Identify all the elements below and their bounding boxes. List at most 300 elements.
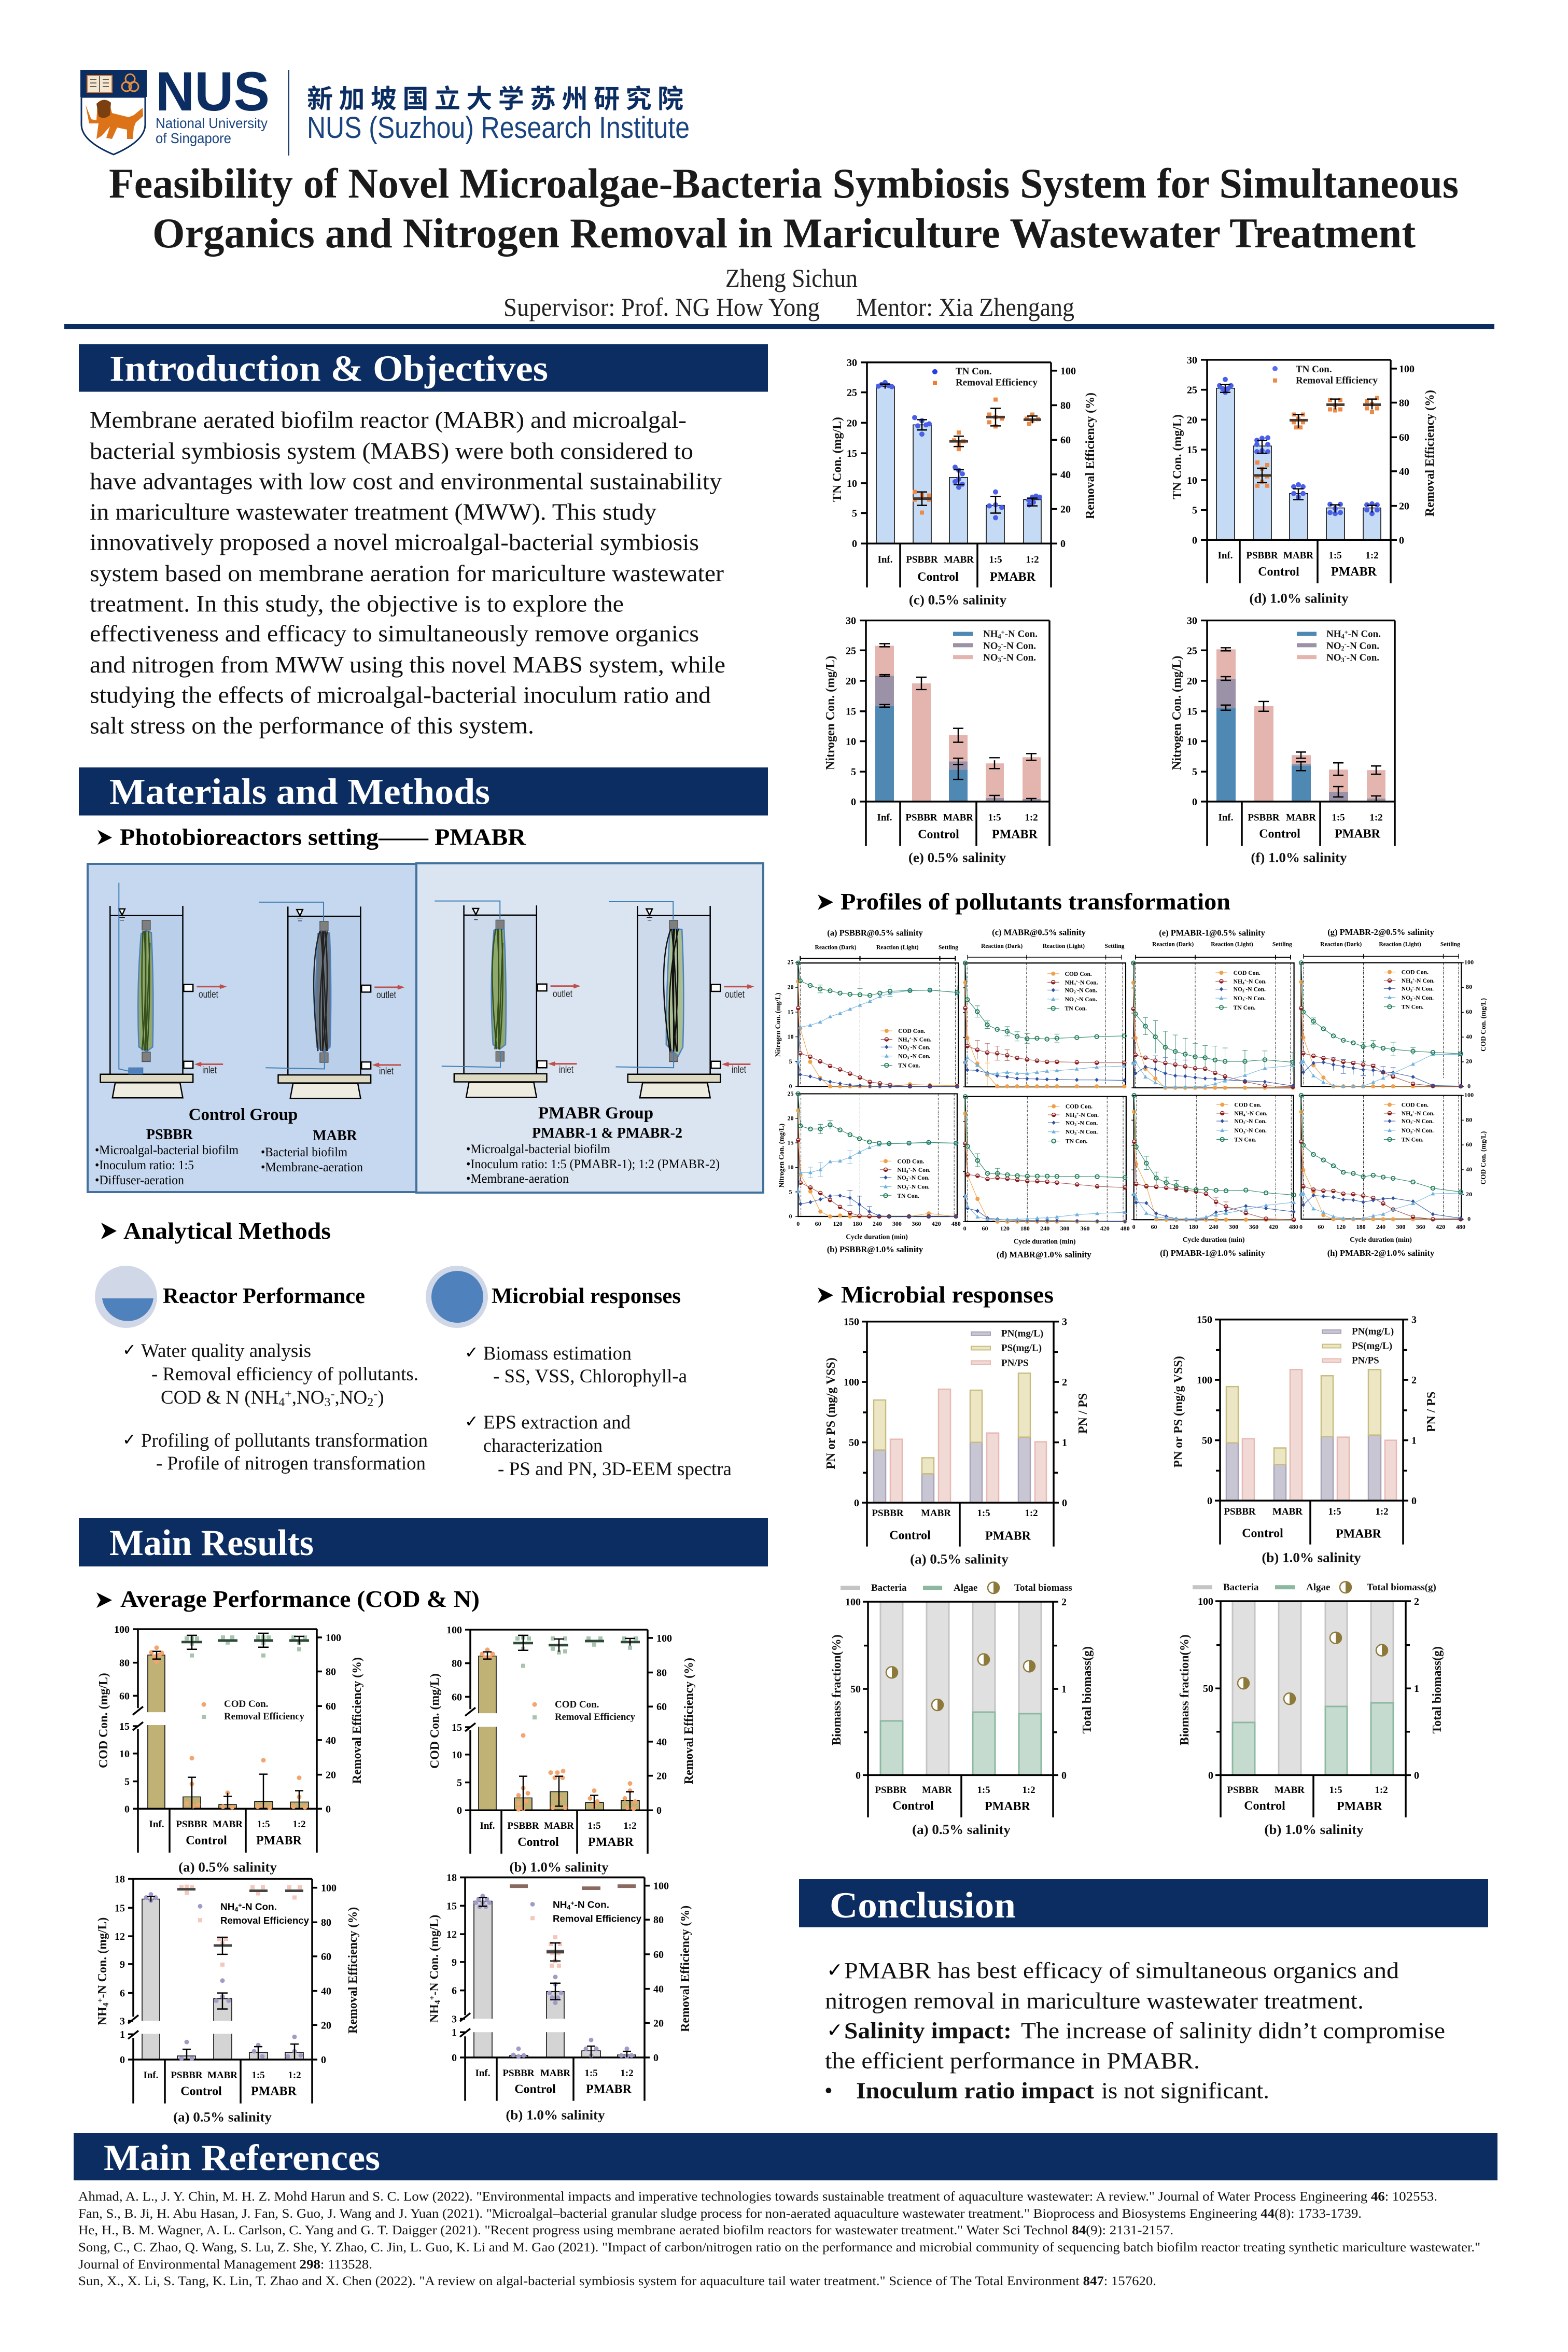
chart: PMABR-2 0.5% profile: 100 bbox=[1464, 958, 1474, 965]
chart: PSBBR 1.0% profile: 180 bbox=[853, 1220, 862, 1227]
chart: EPS 0.5% salinity: 0 bbox=[1062, 1497, 1067, 1509]
chart: biomass 0.5% salinity: 1:5 bbox=[977, 1785, 990, 1796]
chart: COD 0.5% salinity: Removal Efficiency (%) bbox=[351, 1657, 364, 1784]
chart: MABR 1.0% profile: 480 bbox=[1121, 1225, 1130, 1232]
text block: introduction: have advantages with low cost and environmental sustainability bbox=[90, 468, 722, 495]
chart: biomass 1.0% salinity: Biomass fraction(%) bbox=[1178, 1634, 1192, 1745]
list: reactor performance methods: COD & N (NH4+,NO3-,NO2-) bbox=[161, 1387, 384, 1409]
list: microbial response methods: - PS and PN, 3D-EEM spectra bbox=[498, 1459, 732, 1480]
chart: PMABR-1 1.0% profile: 60 bbox=[1151, 1223, 1157, 1230]
chart: nitrogen species 0.5% salinity: 15 bbox=[846, 706, 856, 718]
chart: PMABR-1 1.0% profile: NO2--N Con. bbox=[1234, 1118, 1267, 1125]
diagram: PMABR-1 reactor bbox=[435, 901, 578, 1097]
wordmark: National University of Singapore: of Singapore bbox=[156, 130, 231, 146]
chart: MABR 1.0% profile: 420 bbox=[1100, 1225, 1110, 1232]
chart: TN 1.0% salinity: Inf. bbox=[1217, 550, 1233, 561]
chart: biomass 0.5% salinity: Biomass fraction(%) bbox=[830, 1634, 844, 1745]
chart: TN 0.5% salinity: Removal Efficiency bbox=[956, 377, 1038, 388]
chart: MABR 0.5% profile: NO3--N Con. bbox=[1065, 996, 1097, 1003]
chart: PMABR-2 0.5% profile: NO3--N Con. bbox=[1402, 994, 1434, 1002]
text block: references: He, H., B. M. Wagner, A. L. Carlson, C. Yang and G. T. Daigger (2021). "Recent progress using membrane aerated biofilm reactors for wastewater treatment." Water Sci Technol 84(9): 2131-2157. bbox=[78, 2223, 1173, 2237]
wordmark: National University of Singapore bbox=[156, 115, 268, 146]
chart: biomass 1.0% salinity: 1 bbox=[1414, 1683, 1419, 1695]
chart: TN 1.0% salinity: 60 bbox=[1399, 432, 1409, 443]
chart: TN 1.0% salinity: 40 bbox=[1399, 466, 1409, 478]
chart: COD 0.5% salinity: 60 bbox=[119, 1690, 130, 1702]
chart: PSBBR 1.0% profile: 60 bbox=[815, 1220, 821, 1227]
chart: biomass 1.0% salinity: PSBBR bbox=[1227, 1785, 1259, 1796]
chart: nitrogen species 0.5% salinity bbox=[824, 615, 1049, 865]
chart: PMABR-2 0.5% profile: Reaction (Light) bbox=[1379, 941, 1421, 948]
chart: biomass 0.5% salinity: Bacteria bbox=[871, 1583, 907, 1593]
chart: PSBBR 0.5% profile: 5 bbox=[789, 1058, 792, 1065]
text block: conclusion: PMABR has best efficacy of simultaneous organics and bbox=[844, 1957, 1399, 1983]
chart: PSBBR 1.0% profile: TN Con. bbox=[897, 1193, 919, 1199]
chart: PMABR-2 0.5% profile: TN Con. bbox=[1402, 1004, 1423, 1011]
label: PSBBR: •Microalgal-bacterial biofilm bbox=[95, 1143, 239, 1157]
chart: TN 1.0% salinity: 0 bbox=[1192, 535, 1197, 546]
section header: Conclusion: Conclusion bbox=[830, 1885, 1016, 1926]
chart: COD 0.5% salinity: 10 bbox=[119, 1748, 130, 1760]
chart: PMABR-2 1.0% profile bbox=[1299, 1091, 1487, 1258]
chart: PMABR-2 0.5% profile bbox=[1301, 927, 1487, 1089]
chart: PMABR-1 1.0% profile: TN Con. bbox=[1234, 1136, 1256, 1143]
chart: TN 0.5% salinity: Control bbox=[917, 570, 959, 584]
text block: introduction: Membrane aerated biofilm reactor (MABR) and microalgal- bbox=[90, 407, 687, 433]
subheading: Microbial responses: Microbial responses bbox=[841, 1281, 1054, 1308]
chart: PMABR-1 1.0% profile: 240 bbox=[1209, 1223, 1219, 1230]
chart: PSBBR 1.0% profile: Nitrogen Con. (mg/L) bbox=[778, 1124, 786, 1187]
chart: TN 1.0% salinity: 15 bbox=[1187, 444, 1197, 456]
chart: TN 1.0% salinity: 1:2 bbox=[1365, 550, 1379, 561]
chart: TN 1.0% salinity: 1:5 bbox=[1328, 550, 1342, 561]
text block: references bbox=[78, 2190, 1480, 2288]
chart: biomass 0.5% salinity: (a) 0.5% salinity bbox=[912, 1822, 1011, 1837]
panel: control group reactors bbox=[88, 864, 416, 1192]
chart: PSBBR 0.5% profile: NO3--N Con. bbox=[898, 1053, 931, 1060]
chart: TN 0.5% salinity: TN Con. (mg/L) bbox=[831, 417, 844, 502]
chart: PMABR-2 0.5% profile: 0 bbox=[1467, 1082, 1471, 1089]
chart: ammonium 1.0% salinity: Control bbox=[514, 2083, 556, 2096]
text block: conclusion: ✓ bbox=[827, 2019, 843, 2041]
chart: COD 1.0% salinity: 15 bbox=[452, 1722, 462, 1733]
chart: MABR 0.5% profile: NH4+-N Con. bbox=[1065, 979, 1098, 986]
chart: ammonium 1.0% salinity: NH4+-N Con. bbox=[553, 1899, 609, 1911]
chart: PMABR-2 0.5% profile: Reaction (Dark) bbox=[1320, 941, 1362, 948]
chart: PMABR-2 1.0% profile: 300 bbox=[1396, 1223, 1405, 1230]
text block: introduction bbox=[90, 407, 725, 738]
chart: TN 1.0% salinity: 5 bbox=[1192, 505, 1197, 516]
chart: EPS 0.5% salinity: MABR bbox=[921, 1508, 951, 1519]
chart: PMABR-2 0.5% profile: 20 bbox=[1466, 1058, 1472, 1065]
chart: nitrogen species 1.0% salinity: 0 bbox=[1192, 796, 1197, 808]
chart: ammonium 0.5% salinity: NH4+-N Con. bbox=[220, 1901, 277, 1913]
chart: EPS 1.0% salinity: 1:5 bbox=[1328, 1506, 1341, 1517]
section header: Main References: Main References bbox=[104, 2138, 380, 2178]
heading: Microbial responses: Microbial responses bbox=[492, 1284, 681, 1308]
institute name Chinese: 新加坡国立大学苏州研究院 bbox=[307, 85, 683, 114]
chart: TN 1.0% salinity: PSBBR bbox=[1246, 550, 1278, 561]
chart: EPS 0.5% salinity: 1:5 bbox=[977, 1508, 990, 1519]
text block: conclusion: The increase of salinity didn’t compromise bbox=[1021, 2018, 1445, 2043]
chart: ammonium 0.5% salinity: 100 bbox=[321, 1883, 337, 1894]
chart: MABR 1.0% profile: TN Con. bbox=[1066, 1138, 1087, 1145]
chart: COD 1.0% salinity: 10 bbox=[452, 1749, 462, 1761]
chart: biomass 0.5% salinity: PSBBR bbox=[875, 1785, 907, 1796]
chart: PMABR-2 1.0% profile: COD Con. (mg/L) bbox=[1479, 1131, 1487, 1185]
chart: PMABR-1 0.5% profile: Reaction (Light) bbox=[1211, 941, 1253, 948]
chart: PMABR-2 1.0% profile: 80 bbox=[1466, 1116, 1472, 1123]
chart: PMABR-2 1.0% profile: 240 bbox=[1376, 1223, 1385, 1230]
chart: PSBBR 1.0% profile: 420 bbox=[932, 1220, 941, 1227]
label: PMABR Group: PMABR Group bbox=[538, 1104, 653, 1123]
chart: ammonium 1.0% salinity: 40 bbox=[653, 1984, 664, 1995]
text block: conclusion: is not significant. bbox=[1101, 2078, 1269, 2103]
chart: ammonium 1.0% salinity: Removal Efficiency (%) bbox=[679, 1906, 692, 2032]
chart: biomass 1.0% salinity: 1:2 bbox=[1375, 1785, 1388, 1796]
label: PSBBR bbox=[95, 1127, 239, 1187]
title: Feasibility of Novel Microalgae-Bacteria Symbiosis System for Simultaneous bbox=[109, 160, 1459, 207]
chart: PSBBR 1.0% profile: 25 bbox=[788, 1090, 794, 1097]
chart: ammonium 1.0% salinity: 100 bbox=[653, 1881, 669, 1892]
chart: EPS 0.5% salinity: 50 bbox=[849, 1437, 859, 1449]
chart: PMABR-1 0.5% profile: COD Con. bbox=[1234, 970, 1261, 976]
chart: biomass 0.5% salinity bbox=[830, 1582, 1094, 1837]
chart: PMABR-2 0.5% profile: 60 bbox=[1466, 1008, 1472, 1015]
chart: COD 0.5% salinity: COD Con. (mg/L) bbox=[97, 1673, 110, 1768]
chart: PMABR-1 1.0% profile: 120 bbox=[1169, 1223, 1179, 1230]
chart: ammonium 1.0% salinity: 1:2 bbox=[620, 2068, 634, 2079]
list: reactor performance methods: Water quality analysis bbox=[141, 1340, 311, 1362]
chart: PMABR-2 0.5% profile: NH4+-N Con. bbox=[1402, 977, 1435, 985]
chart: COD 1.0% salinity: 5 bbox=[457, 1777, 462, 1788]
chart: PMABR-2 1.0% profile: 120 bbox=[1336, 1223, 1346, 1230]
chart: COD 0.5% salinity: 100 bbox=[114, 1624, 130, 1635]
section header: Main References bbox=[74, 2133, 1497, 2180]
chart: ammonium 1.0% salinity: PMABR bbox=[586, 2083, 632, 2096]
chart: PMABR-2 0.5% profile: COD Con. bbox=[1402, 969, 1429, 976]
chart: PMABR-2 0.5% profile: COD Con. (mg/L) bbox=[1479, 998, 1487, 1052]
chart: biomass 0.5% salinity: 0 bbox=[856, 1770, 861, 1781]
chart: MABR 1.0% profile: 180 bbox=[1020, 1225, 1030, 1232]
chart: ammonium 0.5% salinity: 6 bbox=[120, 1988, 125, 1999]
panel: control group reactors: inlet bbox=[379, 1066, 394, 1077]
chart: nitrogen species 0.5% salinity: 1:2 bbox=[1025, 813, 1038, 823]
chart: biomass 0.5% salinity: Algae bbox=[954, 1583, 977, 1593]
chart: ammonium 1.0% salinity: 6 bbox=[452, 1985, 457, 1997]
chart: PMABR-2 1.0% profile: 40 bbox=[1466, 1166, 1472, 1173]
chart: ammonium 0.5% salinity: 80 bbox=[321, 1917, 331, 1928]
chart: COD 1.0% salinity bbox=[428, 1625, 696, 1875]
chart: biomass 0.5% salinity: Total biomass(g) bbox=[1081, 1646, 1094, 1733]
chart: PMABR-2 1.0% profile: 20 bbox=[1466, 1191, 1472, 1198]
label: PMABR-1 and PMABR-2 details: PMABR-1 & PMABR-2 bbox=[532, 1125, 682, 1141]
chart: PSBBR 1.0% profile: 15 bbox=[788, 1139, 794, 1146]
chart: MABR 0.5% profile: Reaction (Light) bbox=[1043, 943, 1085, 949]
chart: TN 0.5% salinity: PMABR bbox=[990, 570, 1036, 584]
chart: COD 0.5% salinity: PSBBR bbox=[176, 1819, 208, 1830]
chart: TN 1.0% salinity: 100 bbox=[1399, 363, 1415, 375]
chart: COD 1.0% salinity: 1:5 bbox=[587, 1821, 601, 1831]
chart: ammonium 0.5% salinity: NH4+-N Con. (mg/L) bbox=[96, 1917, 110, 2025]
chart: ammonium 0.5% salinity: Removal Efficiency bbox=[220, 1915, 309, 1926]
chart: nitrogen species 1.0% salinity: NH4+-N Con. bbox=[1326, 628, 1381, 640]
chart: biomass 1.0% salinity: Total biomass(g) bbox=[1367, 1582, 1436, 1593]
subheading: Photobioreactors setting: Photobioreactors setting—— PMABR bbox=[120, 823, 526, 850]
chart: COD 1.0% salinity: 20 bbox=[656, 1771, 667, 1782]
chart: PSBBR 0.5% profile: 20 bbox=[788, 984, 794, 991]
chart: PSBBR 1.0% profile: 10 bbox=[788, 1164, 794, 1171]
chart: COD 1.0% salinity: 60 bbox=[656, 1701, 667, 1713]
chart: MABR 1.0% profile bbox=[963, 1097, 1130, 1259]
panel: PMABR group reactors: outlet bbox=[553, 989, 573, 1000]
chart: PMABR-2 1.0% profile: 100 bbox=[1464, 1091, 1474, 1099]
section header: Main Results bbox=[79, 1518, 768, 1566]
chart: biomass 1.0% salinity: 0 bbox=[1414, 1770, 1419, 1781]
chart: ammonium 1.0% salinity: (b) 1.0% salinity bbox=[506, 2107, 605, 2122]
chart: COD 0.5% salinity: 0 bbox=[326, 1803, 331, 1815]
chart: EPS 1.0% salinity: 0 bbox=[1207, 1495, 1212, 1507]
chart: PMABR-2 0.5% profile: NO2--N Con. bbox=[1402, 985, 1434, 992]
chart: ammonium 0.5% salinity: PSBBR bbox=[171, 2070, 203, 2081]
chart: MABR 1.0% profile: 60 bbox=[982, 1225, 988, 1232]
chart: PMABR-2 1.0% profile: TN Con. bbox=[1402, 1136, 1423, 1143]
chart: ammonium 1.0% salinity: Removal Efficiency bbox=[553, 1913, 641, 1924]
chart: PMABR-2 1.0% profile: NH4+-N Con. bbox=[1402, 1110, 1435, 1117]
chart: nitrogen species 1.0% salinity: Inf. bbox=[1218, 813, 1234, 823]
chart: nitrogen species 1.0% salinity: (f) 1.0% salinity bbox=[1251, 849, 1347, 865]
chart: ammonium 0.5% salinity: 0 bbox=[120, 2054, 125, 2066]
chart: biomass 0.5% salinity: Control bbox=[892, 1799, 934, 1813]
chart: nitrogen species 0.5% salinity: NH4+-N Con. bbox=[983, 628, 1038, 640]
chart: PMABR-1 0.5% profile: (e) PMABR-1@0.5% salinity bbox=[1159, 928, 1266, 938]
list: microbial response methods: EPS extraction and bbox=[483, 1412, 631, 1433]
chart: ammonium 0.5% salinity: 60 bbox=[321, 1951, 331, 1963]
chart: nitrogen species 1.0% salinity: MABR bbox=[1286, 813, 1316, 823]
chart: ammonium 1.0% salinity: 1 bbox=[452, 2027, 457, 2038]
chart: ammonium 1.0% salinity: 80 bbox=[653, 1914, 664, 1926]
chart: EPS 1.0% salinity: (b) 1.0% salinity bbox=[1262, 1549, 1361, 1565]
chart: nitrogen species 0.5% salinity: 25 bbox=[846, 645, 856, 656]
text block: references: Journal of Environmental Management 298: 113528. bbox=[78, 2258, 372, 2272]
chart: EPS 0.5% salinity bbox=[824, 1317, 1090, 1566]
chart: COD 1.0% salinity: 60 bbox=[452, 1691, 462, 1703]
chart: biomass 1.0% salinity: (b) 1.0% salinity bbox=[1264, 1822, 1364, 1837]
chart: PMABR-2 1.0% profile: 480 bbox=[1456, 1223, 1465, 1230]
chart: TN 1.0% salinity: Removal Efficiency (%) bbox=[1423, 390, 1437, 516]
wordmark: National University of Singapore: National University bbox=[156, 115, 268, 131]
chart: ammonium 1.0% salinity: 3 bbox=[452, 2013, 457, 2025]
chart: nitrogen species 0.5% salinity: 1:5 bbox=[988, 813, 1001, 823]
chart: nitrogen species 0.5% salinity: Inf. bbox=[877, 813, 892, 823]
chart: PMABR-1 1.0% profile: COD Con. bbox=[1234, 1101, 1262, 1108]
chart: PSBBR 1.0% profile: 480 bbox=[951, 1220, 961, 1227]
chart: ammonium 0.5% salinity: 40 bbox=[321, 1986, 331, 1997]
list: reactor performance methods: - Removal efficiency of pollutants. bbox=[151, 1364, 418, 1385]
chart: PSBBR 0.5% profile: COD Con. bbox=[898, 1028, 925, 1034]
chart: COD 0.5% salinity: 0 bbox=[124, 1803, 130, 1815]
chart: COD 1.0% salinity: COD Con. bbox=[555, 1699, 599, 1710]
chart: PSBBR 1.0% profile: 0 bbox=[789, 1213, 792, 1220]
chart: EPS 0.5% salinity: 150 bbox=[844, 1317, 859, 1328]
chart: ammonium 0.5% salinity: (a) 0.5% salinity bbox=[173, 2109, 272, 2124]
text block: references: Fan, S., B. Ji, H. Abu Hasan, J. Fan, S. Guo, J. Wang and J. Yuan (2021). "Microalgal–bacterial granular sludge process for non-aerated aquaculture wastewater treatment." Bioprocess and Biosystems Engineering 44(8): 1733-1739. bbox=[78, 2207, 1362, 2221]
chart: TN 1.0% salinity: 25 bbox=[1187, 385, 1197, 396]
chart: TN 1.0% salinity: PMABR bbox=[1331, 565, 1377, 579]
section header: Materials and Methods: Materials and Methods bbox=[109, 772, 490, 813]
chart: PSBBR 1.0% profile: 120 bbox=[833, 1220, 843, 1227]
chart: TN 1.0% salinity: 20 bbox=[1187, 414, 1197, 426]
chart: COD 0.5% salinity: (a) 0.5% salinity bbox=[178, 1859, 277, 1875]
chart: TN 0.5% salinity bbox=[831, 357, 1097, 608]
chart: EPS 1.0% salinity: PN or PS (mg/g VSS) bbox=[1172, 1356, 1185, 1468]
chart: COD 1.0% salinity: 0 bbox=[656, 1805, 662, 1816]
chart: COD 1.0% salinity: PMABR bbox=[588, 1836, 634, 1849]
list: microbial response methods: - SS, VSS, Chlorophyll-a bbox=[493, 1366, 687, 1387]
panel: control group reactors: inlet bbox=[202, 1065, 217, 1076]
label: PMABR-1 and PMABR-2 details: •Inoculum ratio: 1:5 (PMABR-1); 1:2 (PMABR-2) bbox=[466, 1157, 720, 1171]
chart: MABR 1.0% profile: 360 bbox=[1080, 1225, 1089, 1232]
chart: PMABR-1 1.0% profile: 420 bbox=[1269, 1223, 1278, 1230]
chart: EPS 0.5% salinity: PMABR bbox=[985, 1530, 1031, 1543]
text block: references: Sun, X., X. Li, S. Tang, K. Lin, T. Zhao and X. Chen (2022). "A review on algal-bacterial symbiosis system for aquaculture tail water treatment." Science of The Total Environment 847: 157620. bbox=[78, 2274, 1156, 2288]
chart: EPS 0.5% salinity: (a) 0.5% salinity bbox=[910, 1551, 1009, 1566]
chart: nitrogen species 0.5% salinity: (e) 0.5% salinity bbox=[908, 849, 1006, 865]
chart: MABR 1.0% profile: COD Con. bbox=[1066, 1103, 1093, 1110]
chart: ammonium 1.0% salinity bbox=[428, 1872, 692, 2122]
chart: EPS 1.0% salinity: 2 bbox=[1411, 1375, 1417, 1386]
chart: PSBBR 0.5% profile: Reaction (Dark) bbox=[815, 944, 857, 950]
chart: TN 1.0% salinity: MABR bbox=[1283, 550, 1313, 561]
chart: TN 1.0% salinity: Control bbox=[1258, 565, 1299, 579]
diagram: PMABR-2 reactor bbox=[609, 902, 752, 1098]
chart: COD 0.5% salinity: MABR bbox=[213, 1819, 243, 1830]
chart: PSBBR 1.0% profile: NO2--N Con. bbox=[897, 1174, 930, 1182]
chart: nitrogen species 0.5% salinity: PMABR bbox=[992, 828, 1038, 842]
chart: TN 0.5% salinity: PSBBR bbox=[906, 554, 938, 565]
chart: PSBBR 0.5% profile bbox=[774, 928, 958, 1090]
chart: PMABR-1 1.0% profile: 0 bbox=[1132, 1223, 1136, 1230]
label: PMABR-1 and PMABR-2 details: •Microalgal-bacterial biofilm bbox=[466, 1142, 611, 1156]
chart: biomass 1.0% salinity: 50 bbox=[1203, 1683, 1213, 1695]
chart: TN 1.0% salinity: 80 bbox=[1399, 398, 1409, 409]
chart: ammonium 1.0% salinity: NH4+-N Con. (mg/L) bbox=[428, 1915, 442, 2023]
chart: PMABR-2 0.5% profile: Settling bbox=[1440, 941, 1460, 948]
subheading: Analytical Methods: Analytical Methods bbox=[123, 1217, 331, 1244]
chart: TN 1.0% salinity: 20 bbox=[1399, 501, 1409, 512]
chart: nitrogen species 1.0% salinity: Control bbox=[1259, 828, 1300, 841]
list: microbial response methods: characterization bbox=[483, 1435, 603, 1457]
chart: EPS 1.0% salinity: 3 bbox=[1411, 1314, 1417, 1326]
chart: TN 0.5% salinity: 10 bbox=[847, 478, 857, 489]
chart: PSBBR 1.0% profile: Cycle duration (min) bbox=[846, 1233, 908, 1240]
text block: references: Song, C., C. Zhao, Q. Wang, S. Lu, Z. She, Y. Zhao, C. Jin, L. Guo, K. Li and M. Gao (2021). "Impact of carbon/nitrogen ratio on the performance and microbial community of sequencing batch biofilm reactor treating synthetic mariculture wastewater." bbox=[78, 2241, 1480, 2255]
authors bbox=[503, 263, 1074, 321]
chart: TN 0.5% salinity: 0 bbox=[1060, 538, 1066, 550]
chart: biomass 0.5% salinity: 1 bbox=[1061, 1684, 1067, 1695]
chart: TN 1.0% salinity: 30 bbox=[1187, 355, 1197, 366]
chart: COD 0.5% salinity: PMABR bbox=[256, 1834, 302, 1847]
chart: COD 1.0% salinity: 80 bbox=[452, 1658, 462, 1670]
chart: nitrogen species 1.0% salinity: 1:5 bbox=[1332, 813, 1345, 823]
chart: biomass 1.0% salinity: 100 bbox=[1198, 1596, 1213, 1607]
chart: MABR 0.5% profile: (c) MABR@0.5% salinity bbox=[992, 928, 1086, 937]
text block: introduction: salt stress on the performance of this system. bbox=[90, 712, 534, 738]
chart: nitrogen species 0.5% salinity: NO2--N Con. bbox=[983, 640, 1036, 652]
chart: biomass 1.0% salinity: 2 bbox=[1414, 1596, 1419, 1607]
chart: PMABR-1 0.5% profile: TN Con. bbox=[1234, 1004, 1255, 1011]
chart: PSBBR 0.5% profile: Reaction (Light) bbox=[876, 944, 919, 950]
chart: MABR 1.0% profile: Cycle duration (min) bbox=[1014, 1237, 1076, 1245]
chart: PMABR-2 1.0% profile: COD Con. bbox=[1402, 1101, 1429, 1108]
text block: conclusion bbox=[824, 1957, 1445, 2103]
text block: conclusion: the efficient performance in PMABR. bbox=[825, 2048, 1200, 2074]
chart: nitrogen species 1.0% salinity: PSBBR bbox=[1248, 813, 1280, 823]
panel: PMABR group reactors: inlet bbox=[559, 1065, 574, 1075]
chart: nitrogen species 1.0% salinity: 1:2 bbox=[1369, 813, 1383, 823]
chart: biomass 0.5% salinity: PMABR bbox=[985, 1800, 1031, 1813]
chart: MABR 1.0% profile: 300 bbox=[1060, 1225, 1070, 1232]
chart: ammonium 1.0% salinity: 15 bbox=[446, 1900, 457, 1912]
chart: COD 0.5% salinity: 15 bbox=[119, 1721, 130, 1732]
chart: biomass 1.0% salinity: 0 bbox=[1208, 1770, 1213, 1781]
chart: TN 0.5% salinity: 100 bbox=[1060, 366, 1076, 377]
chart: PSBBR 0.5% profile: 15 bbox=[788, 1008, 794, 1015]
chart: TN 0.5% salinity: 15 bbox=[847, 448, 857, 459]
list: reactor performance methods: ✓ bbox=[122, 1430, 136, 1449]
chart: PMABR-1 1.0% profile: 480 bbox=[1289, 1223, 1298, 1230]
chart: PSBBR 1.0% profile: 240 bbox=[873, 1220, 882, 1227]
chart: TN 0.5% salinity: 25 bbox=[847, 387, 857, 399]
section header: Conclusion bbox=[799, 1879, 1488, 1927]
chart: nitrogen species 1.0% salinity: 10 bbox=[1187, 736, 1197, 747]
authors: Zheng Sichun bbox=[725, 263, 858, 292]
chart: MABR 0.5% profile: Reaction (Dark) bbox=[981, 943, 1023, 949]
text block: conclusion: Inoculum ratio impact bbox=[856, 2078, 1094, 2103]
chart: biomass 0.5% salinity: 2 bbox=[1061, 1597, 1067, 1608]
chart: TN 0.5% salinity: 1:5 bbox=[989, 554, 1002, 565]
chart: PMABR-2 0.5% profile: 40 bbox=[1466, 1033, 1472, 1040]
chart: PSBBR 0.5% profile: (a) PSBBR@0.5% salinity bbox=[827, 928, 923, 938]
chart: nitrogen species 0.5% salinity: PSBBR bbox=[905, 813, 937, 823]
diagram: PSBBR reactor bbox=[101, 883, 225, 1098]
chart: PMABR-1 0.5% profile: NO2--N Con. bbox=[1234, 986, 1266, 993]
chart: ammonium 1.0% salinity: PSBBR bbox=[502, 2068, 535, 2079]
chart: EPS 1.0% salinity: 1:2 bbox=[1375, 1506, 1389, 1517]
chart: nitrogen species 1.0% salinity: Nitrogen Con. (mg/L) bbox=[1170, 655, 1184, 770]
chart: ammonium 0.5% salinity: 1 bbox=[120, 2029, 125, 2040]
chart: ammonium 1.0% salinity: 0 bbox=[452, 2052, 457, 2064]
chart: PSBBR 0.5% profile: 0 bbox=[789, 1083, 792, 1090]
text block: conclusion: • bbox=[824, 2078, 833, 2103]
chart: PSBBR 1.0% profile: 360 bbox=[912, 1220, 921, 1227]
chart: TN 0.5% salinity: 1:2 bbox=[1026, 554, 1039, 565]
chart: PMABR-1 1.0% profile: 180 bbox=[1189, 1223, 1198, 1230]
text block: conclusion: nitrogen removal in mariculture wastewater treatment. bbox=[825, 1988, 1364, 2013]
chart: PMABR-2 1.0% profile: 0 bbox=[1299, 1223, 1303, 1230]
chart: EPS 0.5% salinity: PN or PS (mg/g VSS) bbox=[824, 1357, 838, 1469]
panel: control group reactors: outlet bbox=[199, 989, 219, 1000]
chart: COD 0.5% salinity: 1:5 bbox=[257, 1819, 270, 1830]
chart: COD 1.0% salinity: 100 bbox=[656, 1633, 672, 1644]
chart: COD 1.0% salinity: MABR bbox=[544, 1821, 574, 1831]
chart: MABR 0.5% profile: COD Con. bbox=[1065, 971, 1092, 977]
panel: PMABR group reactors: inlet bbox=[732, 1065, 747, 1075]
chart: MABR 0.5% profile: Settling bbox=[1105, 943, 1125, 949]
chart: COD 1.0% salinity: 80 bbox=[656, 1668, 667, 1678]
chart: TN 0.5% salinity: 20 bbox=[1060, 504, 1071, 515]
chart: biomass 1.0% salinity: Control bbox=[1244, 1799, 1285, 1813]
